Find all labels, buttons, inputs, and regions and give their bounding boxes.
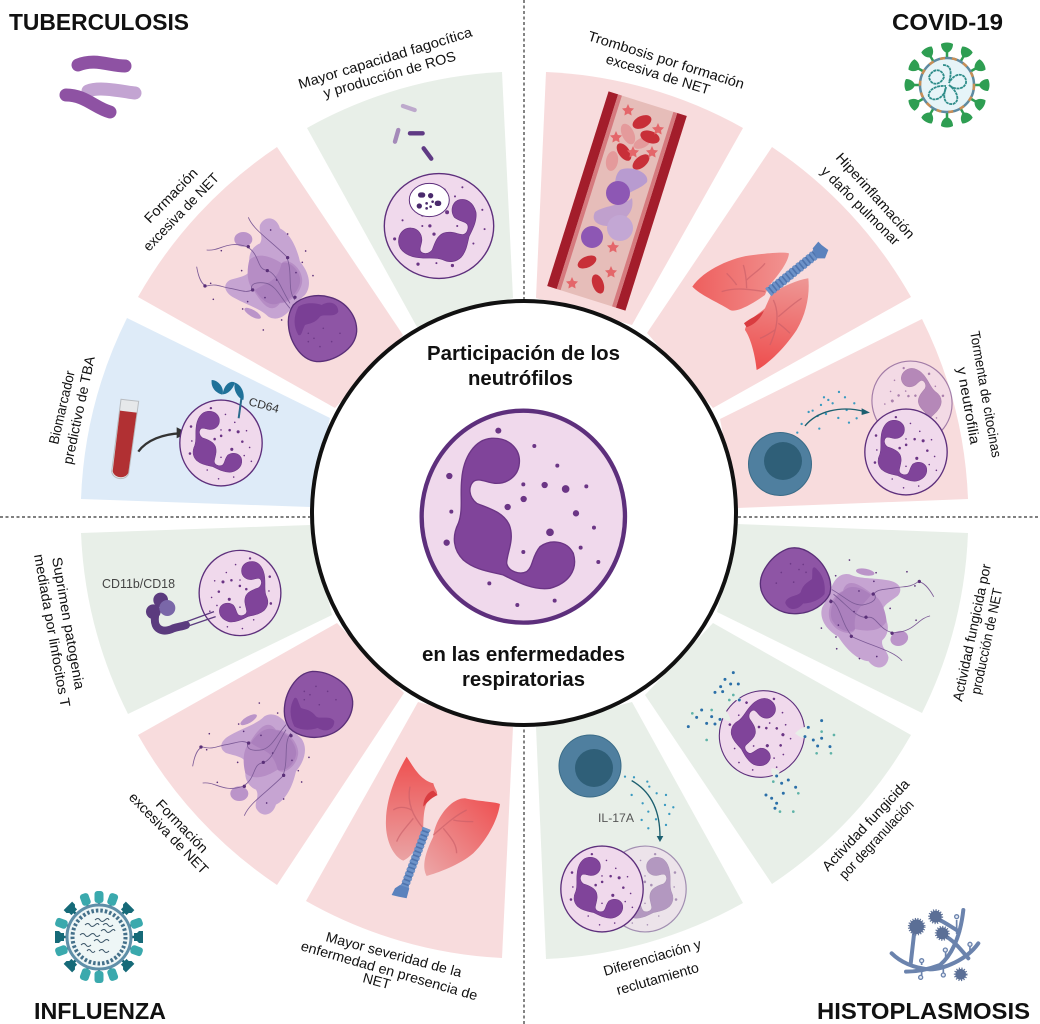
neutrophil degranulating xyxy=(702,674,822,794)
label: diferenciación: Diferenciación y xyxy=(601,936,703,979)
label: enfermedad en presencia de: enfermedad en presencia de xyxy=(299,938,480,1003)
panel: histoplasmosis NET xyxy=(717,508,1005,713)
panel: influenza severity xyxy=(299,702,513,1003)
panel: influenza T cell suppression xyxy=(31,525,332,714)
icon: CD64 receptor xyxy=(212,380,244,418)
panel: tuberculosis NET xyxy=(138,147,403,408)
neutrophil xyxy=(199,550,281,636)
title: influenza: INFLUENZA xyxy=(34,998,166,1024)
label: mayor severidad: Mayor severidad de la xyxy=(324,928,464,980)
label: excesiva de NET: excesiva de NET xyxy=(140,169,222,254)
cytokines xyxy=(625,777,673,828)
central neutrophil xyxy=(422,411,625,623)
label: formación: Formación xyxy=(141,165,201,226)
icon: T cell xyxy=(559,735,621,797)
membrane notches xyxy=(719,695,806,778)
label: excesiva de NET: excesiva de NET xyxy=(604,51,713,98)
panel: influenza NET xyxy=(126,623,404,885)
wedge: green background xyxy=(81,525,332,714)
arrow: blood to neutrophil xyxy=(138,427,188,452)
wedge: green background xyxy=(536,702,743,959)
illustration: blood vessel xyxy=(547,91,687,311)
title: covid-19: COVID-19 xyxy=(892,9,1003,35)
label: biomarcador: Biomarcador xyxy=(45,369,78,446)
label: NET: NET xyxy=(361,969,393,992)
icon: tuberculosis bacilli xyxy=(66,62,135,112)
heading line 4: respiratorias xyxy=(462,669,585,691)
icon: histoplasma mold xyxy=(892,910,978,980)
granules xyxy=(688,673,830,808)
title: histoplasmosis: HISTOPLASMOSIS xyxy=(817,998,1030,1024)
label: trombosis: Trombosis por formación xyxy=(586,28,746,92)
panel: tuberculosis phagocytosis xyxy=(296,24,513,327)
neutrophil xyxy=(561,846,643,932)
icon: bacilli xyxy=(395,106,431,159)
neutrophil xyxy=(180,400,262,486)
wedge: green background xyxy=(645,623,911,884)
illustration: NET-forming neutrophil xyxy=(751,508,951,698)
cytokines xyxy=(797,392,857,433)
panel: covid thrombosis xyxy=(536,28,746,325)
icon: blood tube xyxy=(112,399,139,479)
illustration: NET-forming neutrophil xyxy=(197,217,357,362)
label: neutrofilia: y neutrofilia xyxy=(954,366,983,446)
title: tuberculosis: TUBERCULOSIS xyxy=(9,9,189,35)
label: excesiva de NET: excesiva de NET xyxy=(126,789,212,877)
heading line 2: neutrófilos xyxy=(468,368,573,390)
wedge: pink background xyxy=(536,72,743,325)
wedge: pink background xyxy=(720,319,968,508)
label: mediada por linfocitos T: mediada por linfocitos T xyxy=(31,553,74,709)
icon: phagosome xyxy=(409,183,449,217)
center circle xyxy=(312,301,736,725)
panel: histoplasmosis degranulation xyxy=(645,623,917,884)
label: formación: Formación xyxy=(153,796,212,856)
label: por degranulación: por degranulación xyxy=(835,797,917,882)
label: predictivo: predictivo de TBA xyxy=(59,354,98,466)
neutrophil xyxy=(865,409,947,495)
illustration: lungs xyxy=(692,242,828,370)
label: CD64: CD64 xyxy=(247,396,281,416)
illustration: NET-forming neutrophil xyxy=(193,671,353,816)
label: suprimen patogenia: Suprimen patogenia xyxy=(49,556,88,691)
panel: covid hyperinflammation xyxy=(647,147,918,408)
heading line 3: en las enfermedades xyxy=(422,644,625,666)
label: mayor capacidad: Mayor capacidad fagocítica xyxy=(296,24,474,92)
arrow: cytokines to neutrophil xyxy=(805,408,870,426)
icon: CD11b/CD18 integrin xyxy=(146,593,216,631)
label: hiperinflamación: Hiperinflamación xyxy=(833,149,918,242)
wedge: blue background xyxy=(81,318,330,507)
arrow: IL-17A xyxy=(632,781,663,842)
wedge: green background xyxy=(307,72,513,327)
label: producción de NET: producción de NET xyxy=(967,586,1005,696)
central heading bottom xyxy=(422,644,625,691)
wedge: pink background xyxy=(138,623,404,885)
panel: tuberculosis biomarker xyxy=(45,318,330,507)
neutrophil xyxy=(384,174,494,278)
icon: T cell xyxy=(748,432,812,496)
faded neutrophil xyxy=(857,346,967,458)
illustration: lungs xyxy=(386,757,500,898)
wedge: green background xyxy=(717,524,968,713)
wedge: pink background xyxy=(138,147,403,408)
central heading top xyxy=(427,343,620,390)
heading line 1: Participación de los xyxy=(427,343,620,365)
wedge: pink background xyxy=(306,702,513,958)
faded neutrophil xyxy=(604,846,686,932)
icon: influenza virus xyxy=(54,891,144,983)
label: IL-17A: IL-17A xyxy=(598,811,634,825)
label: CD11b/CD18: CD11b/CD18 xyxy=(102,577,175,591)
label: daño pulmonar: y daño pulmonar xyxy=(818,163,904,249)
label: tormenta: Tormenta de citocinas xyxy=(967,330,1005,459)
panel: histoplasmosis recruitment xyxy=(536,702,743,998)
icon: coronavirus xyxy=(904,42,990,128)
label: actividad fungicida por: Actividad fungicida por xyxy=(949,562,994,703)
label: actividad fungicida: Actividad fungicida xyxy=(819,776,913,874)
label: producción de ROS: y producción de ROS xyxy=(321,48,458,101)
wedge: pink background xyxy=(647,147,911,408)
panel: covid cytokine storm xyxy=(720,319,1005,508)
label: reclutamiento: reclutamiento xyxy=(614,959,701,998)
